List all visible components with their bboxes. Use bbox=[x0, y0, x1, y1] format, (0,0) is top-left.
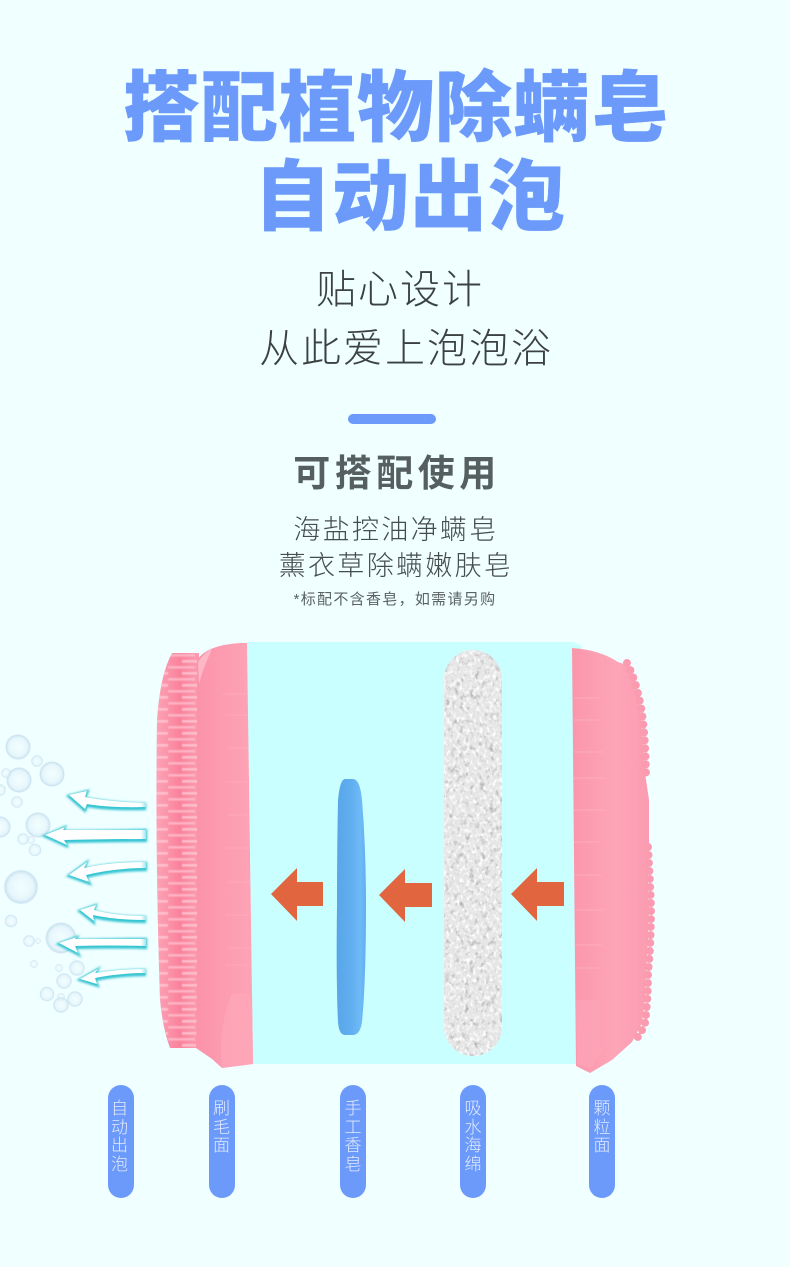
section heading: 可搭配使用 bbox=[293, 453, 501, 494]
footnote: *标配不含香皂，如需请另购 bbox=[294, 591, 496, 608]
label pill: 手工香皂: 手 bbox=[344, 1099, 362, 1118]
subtitle line 1: 贴心设计 bbox=[316, 268, 484, 312]
arrow 1 bbox=[68, 791, 146, 811]
arrow: orange arrow to sponge bbox=[511, 868, 564, 921]
panel: cyan exploded-view backdrop bbox=[247, 642, 582, 1064]
bristles bbox=[155, 650, 201, 1050]
label pill: 颗粒面: 粒 bbox=[594, 1118, 610, 1136]
label pill: 自动出泡 bbox=[108, 1085, 134, 1198]
arrow 2 bbox=[44, 827, 146, 847]
arrow: orange arrow to brush bbox=[271, 868, 323, 921]
icon: absorbent sponge bbox=[444, 650, 502, 1056]
label pill: 颗粒面 bbox=[589, 1085, 615, 1198]
label pill: 手工香皂: 皂 bbox=[344, 1154, 362, 1174]
arrow 4 bbox=[79, 905, 146, 923]
icon: right granular face body bbox=[572, 648, 651, 1073]
label pill: 刷毛面: 刷 bbox=[213, 1099, 230, 1118]
label pill: 吸水海绵 bbox=[460, 1085, 486, 1198]
icon: blue handmade soap bbox=[337, 779, 366, 1035]
brush shell bbox=[196, 643, 253, 1068]
label pill: 吸水海绵: 绵 bbox=[464, 1154, 482, 1174]
arrow: orange arrow to soap bbox=[379, 869, 432, 922]
label pill: 吸水海绵: 海 bbox=[464, 1136, 482, 1155]
label pill: 吸水海绵: 水 bbox=[464, 1118, 482, 1136]
soap list: 海盐控油净螨皂 bbox=[293, 515, 499, 545]
icon: left brush face body bbox=[155, 643, 253, 1068]
title line 2: 自动出泡 bbox=[254, 155, 566, 241]
label pill: 手工香皂 bbox=[340, 1085, 366, 1198]
soap list: 薰衣草除螨嫩肤皂 bbox=[279, 551, 513, 581]
accent bar bbox=[348, 414, 436, 424]
label pill: 自动出泡: 动 bbox=[111, 1118, 128, 1136]
bubbles bbox=[0, 734, 85, 1013]
soap list bbox=[279, 515, 513, 581]
arrow 6 bbox=[79, 969, 146, 986]
arrow 5 bbox=[58, 937, 146, 955]
label pill: 自动出泡: 出 bbox=[111, 1136, 128, 1155]
title line 1: 搭配植物除螨皂 bbox=[123, 66, 669, 152]
label pill: 手工香皂: 工 bbox=[344, 1118, 362, 1136]
label pill: 自动出泡: 泡 bbox=[111, 1154, 128, 1174]
exploded product diagram bbox=[0, 642, 655, 1073]
foam arrows bbox=[44, 791, 146, 986]
label pill: 刷毛面 bbox=[209, 1085, 235, 1198]
label pill: 刷毛面: 面 bbox=[213, 1136, 230, 1155]
label pill: 刷毛面: 毛 bbox=[213, 1118, 230, 1136]
label pill: 自动出泡: 自 bbox=[111, 1099, 128, 1118]
label pill: 手工香皂: 香 bbox=[344, 1136, 362, 1155]
arrow 3 bbox=[68, 862, 146, 884]
label pill: 颗粒面: 面 bbox=[594, 1136, 610, 1155]
subtitle line 2: 从此爱上泡泡浴 bbox=[259, 327, 553, 371]
label pill: 吸水海绵: 吸 bbox=[464, 1099, 482, 1118]
granular edge bumps bbox=[627, 663, 651, 1042]
label pill: 颗粒面: 颗 bbox=[594, 1099, 610, 1118]
